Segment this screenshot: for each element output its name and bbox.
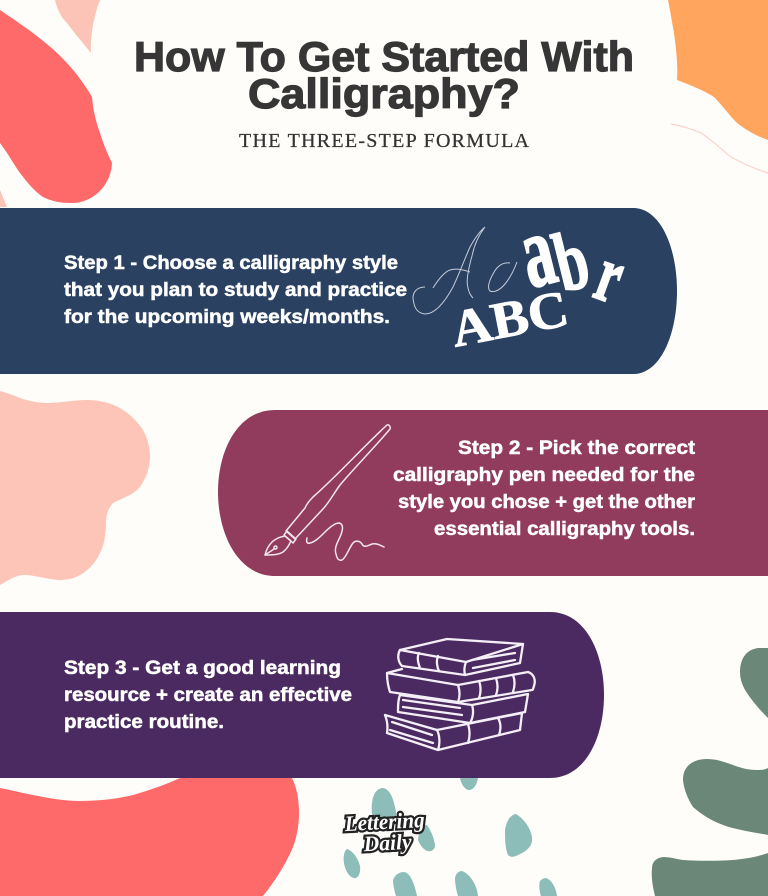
decorative line: top-right pink curve <box>671 124 768 173</box>
step 1 text: Step 1 - Choose a calligraphy style <box>64 253 398 274</box>
subtitle: THE THREE-STEP FORMULA <box>239 130 530 152</box>
decorative dots: teal drops <box>344 778 557 896</box>
decorative blob: right green lower lobe <box>652 853 768 896</box>
icon: calligraphy letter samples: b <box>545 213 598 310</box>
step 1 text: that you plan to study and practice <box>64 280 407 301</box>
title: How To Get Started With <box>134 33 634 80</box>
step 3 text <box>64 658 352 733</box>
step 3 text: Step 3 - Get a good learning <box>64 658 341 679</box>
step 2 text: Step 2 - Pick the correct <box>458 438 696 459</box>
step 1 text <box>64 253 407 328</box>
panel: step 2 <box>218 410 768 576</box>
title <box>134 33 634 117</box>
logo: Lettering Daily: Lettering <box>343 807 425 836</box>
decorative blob: small peach sliver <box>0 190 7 207</box>
logo: Lettering Daily <box>343 807 425 856</box>
step 2 text: style you chose + get the other <box>398 492 696 513</box>
icon: fountain pen with squiggle <box>265 425 390 560</box>
panel: step 1 <box>0 194 677 374</box>
icon: calligraphy letter samples: a <box>508 194 566 310</box>
decorative blob: right green upper lobe <box>740 648 768 718</box>
step 3 text: resource + create an effective <box>64 685 352 706</box>
decorative blob: left peach <box>0 391 150 585</box>
icon: stack of books <box>385 639 535 750</box>
title: Calligraphy? <box>248 70 520 117</box>
step 1 text: for the upcoming weeks/months. <box>64 307 390 328</box>
step 2 text: essential calligraphy tools. <box>434 519 695 540</box>
step 3 text: practice routine. <box>64 712 224 733</box>
step 2 text <box>393 438 696 540</box>
icon: calligraphy letter samples: ABC <box>446 280 573 359</box>
decorative blob: bottom-left coral <box>0 778 299 896</box>
step 2 text: calligraphy pen needed for the <box>393 465 695 486</box>
icon: calligraphy letter samples <box>413 194 636 359</box>
decorative blob: right green middle lobe <box>683 759 768 835</box>
decorative blob: top-right orange <box>668 0 768 140</box>
logo: Lettering Daily: Daily <box>362 829 412 856</box>
panel: step 3 <box>0 612 604 778</box>
decorative blob: top-left coral <box>0 10 112 203</box>
decorative blob: top-left peach <box>55 0 100 53</box>
icon: calligraphy letter samples: r <box>585 231 636 320</box>
